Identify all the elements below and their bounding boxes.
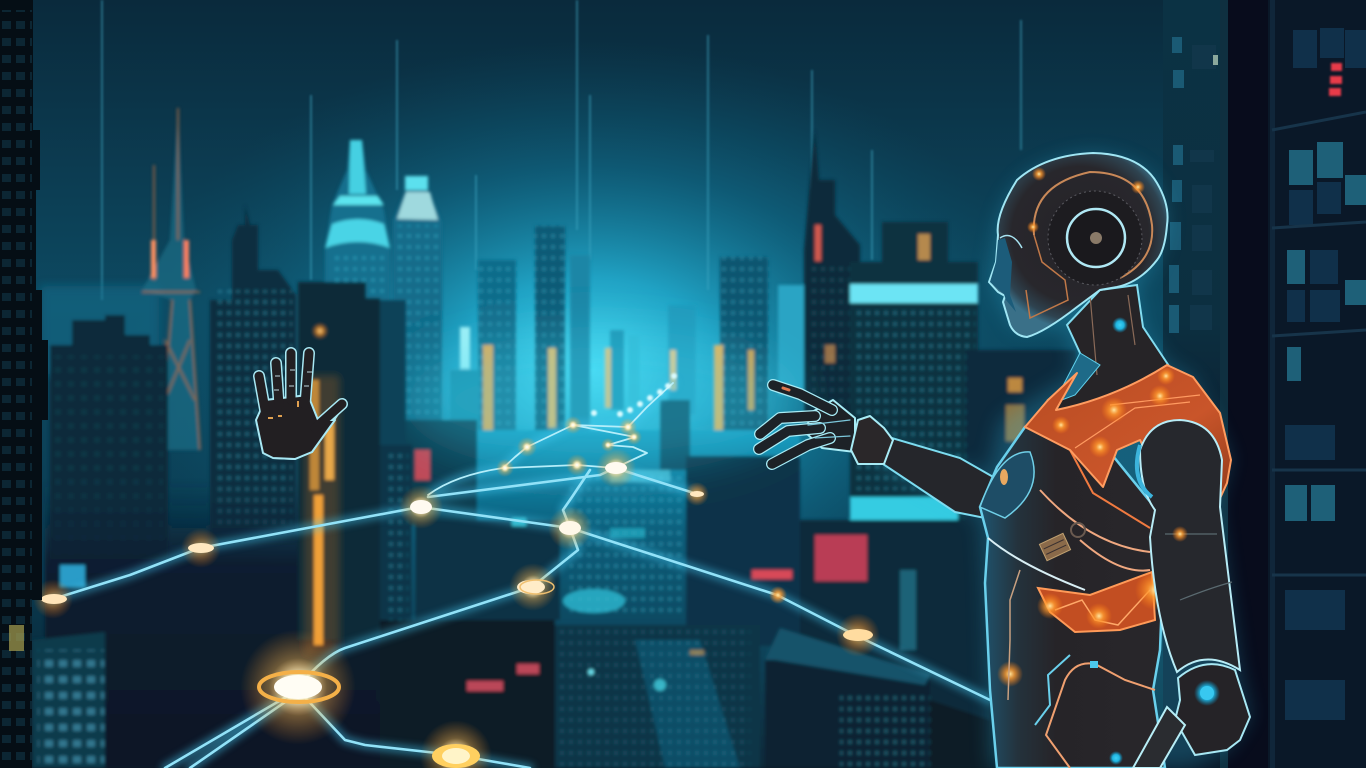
radio tower with orange lights	[142, 108, 200, 450]
robot torso	[980, 427, 1175, 768]
robot figure	[759, 153, 1250, 768]
large office block with cyan bands	[825, 222, 978, 525]
floating human hand	[256, 353, 345, 459]
right lower city block with red signs	[752, 520, 990, 768]
crown tower with cyan lights	[325, 140, 390, 440]
network of glowing light trails	[50, 383, 990, 768]
robot near arm	[1137, 420, 1240, 672]
central city floor and avenue	[400, 400, 800, 768]
glowing top tower	[393, 176, 442, 420]
robot extended arm	[880, 436, 995, 518]
robot outer glow	[880, 153, 1250, 768]
far left tower block	[50, 315, 168, 590]
distant skyline	[40, 226, 804, 480]
left edge skyscraper	[0, 0, 48, 768]
foreground rooftops	[32, 620, 990, 768]
dark tower left of centre	[210, 205, 296, 540]
vertical light beams	[102, 0, 1021, 300]
city backdrop, softly focused	[32, 108, 1076, 768]
tall dark tower right of centre	[804, 130, 860, 420]
dark navy ground on the left	[45, 480, 405, 768]
central tower with orange strip	[298, 282, 412, 655]
robot reaching hand	[759, 385, 893, 464]
horizon atmosphere haze	[400, 330, 800, 470]
robot neck	[1048, 285, 1175, 415]
right foreground skyscraper	[1163, 0, 1366, 768]
robot orange shoulder plate	[1025, 365, 1231, 505]
robot head	[989, 153, 1168, 337]
robot lower hand	[1133, 664, 1250, 768]
network nodes: glowing lights	[33, 416, 880, 768]
chain of distant road lights	[591, 373, 677, 417]
glowing orange street-light columns	[483, 345, 754, 470]
right mid-ground towers	[966, 350, 1076, 560]
